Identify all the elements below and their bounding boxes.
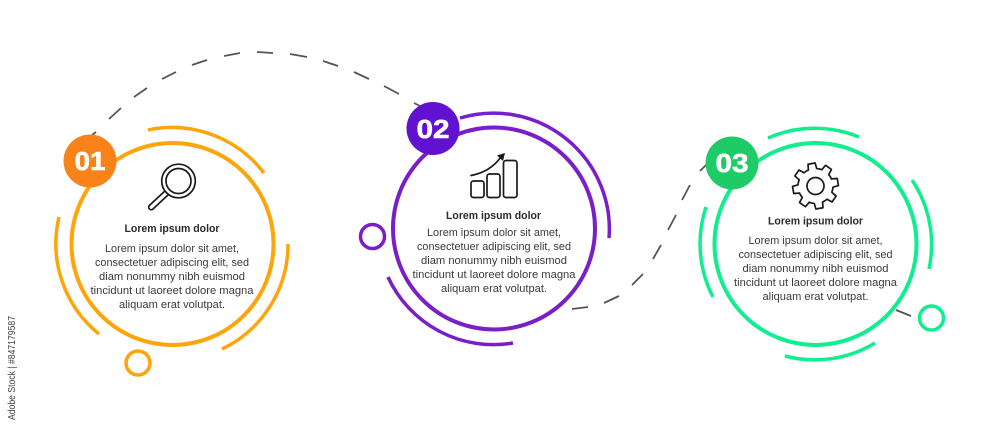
number badge 02	[406, 102, 460, 155]
text block 1: Lorem ipsum dolor sit amet,	[105, 243, 239, 255]
text block 2: consectetuer adipiscing elit, sed	[417, 241, 571, 253]
icon: rising bar chart	[471, 153, 517, 198]
outer arcs 3	[700, 128, 932, 360]
text block 2: aliquam erat volutpat.	[441, 283, 547, 295]
text block 1: consectetuer adipiscing elit, sed	[95, 257, 249, 269]
heading 3: Lorem ipsum dolor	[768, 216, 864, 228]
panel: step 2	[360, 102, 609, 345]
text block 3: diam nonummy nibh euismod	[742, 263, 888, 275]
number badge 01	[64, 134, 116, 188]
dashed connector: step 1 to step 2	[92, 52, 420, 135]
main ring 2	[393, 128, 595, 330]
text block 3: consectetuer adipiscing elit, sed	[738, 249, 892, 261]
outer arcs 2	[388, 113, 609, 345]
vertical image credit: Adobe Stock | #847179587	[7, 316, 18, 420]
number badge 03: 03	[716, 148, 748, 178]
small circle 3	[920, 306, 944, 330]
dashed connector: step 2 to step 3	[572, 165, 706, 309]
text block 2	[412, 227, 576, 295]
text block 2: Lorem ipsum dolor sit amet,	[427, 227, 561, 239]
text block 1: diam nonummy nibh euismod	[99, 271, 245, 283]
text block 2: tincidunt ut laoreet dolore magna	[412, 269, 576, 281]
text block 3: aliquam erat volutpat.	[762, 291, 868, 303]
text block 3: tincidunt ut laoreet dolore magna	[734, 277, 898, 289]
number badge 02: 02	[416, 114, 450, 144]
text block 2: diam nonummy nibh euismod	[421, 255, 567, 267]
number badge 01: 01	[74, 146, 106, 176]
icon: magnifying glass	[149, 164, 195, 210]
heading 2: Lorem ipsum dolor	[446, 210, 542, 222]
small circle 1	[126, 351, 150, 375]
panel: step 3	[700, 128, 944, 360]
panel: step 1	[56, 128, 288, 375]
text block 1: aliquam erat volutpat.	[119, 299, 225, 311]
dashed connector: step 3 to end circle	[896, 310, 911, 316]
number badge 03	[706, 136, 758, 190]
text block 1: tincidunt ut laoreet dolore magna	[90, 285, 254, 297]
outer arcs 1	[56, 128, 288, 349]
main ring 1	[72, 143, 274, 345]
text block 1	[90, 243, 254, 311]
main ring 3	[714, 143, 916, 345]
icon: gear	[789, 160, 842, 212]
text block 3	[734, 235, 898, 303]
small circle 2	[360, 224, 384, 248]
text block 3: Lorem ipsum dolor sit amet,	[748, 235, 882, 247]
heading 1: Lorem ipsum dolor	[124, 223, 220, 235]
